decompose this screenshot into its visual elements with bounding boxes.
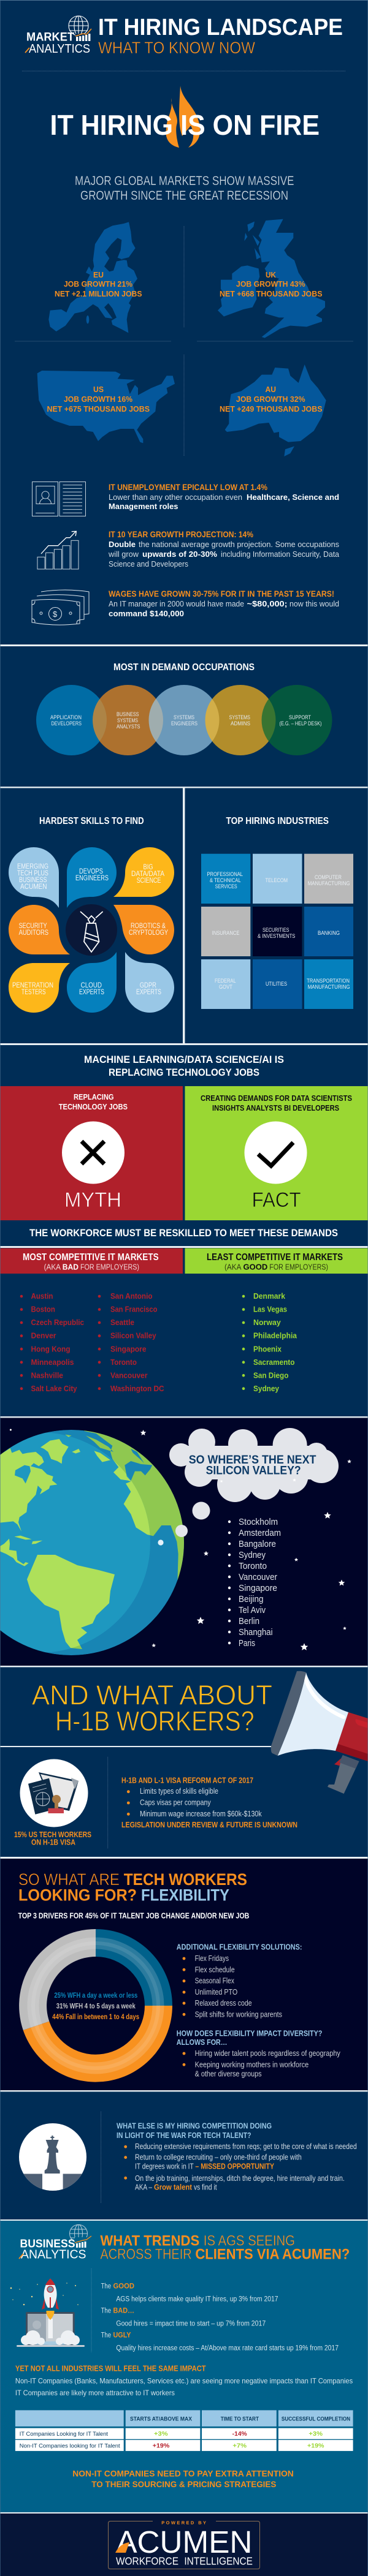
tile: securities: SECURITIES (263, 927, 289, 934)
donut labels: 44% Fall in between 1 to 4 days (52, 2014, 139, 2021)
petal: emerging tech: BUSINESS (19, 875, 47, 884)
petal: cloud experts: EXPERTS (79, 988, 104, 996)
table: companies comparison: +3% (309, 2431, 323, 2438)
list: Washington DC (110, 1384, 164, 1393)
stat: US: US (93, 385, 104, 394)
list: cities: Berlin (239, 1616, 259, 1626)
text: visa reform act: Minimum wage increase from $60k-$130k (140, 1810, 262, 1818)
list: additional flexibility solutions: Flex Fridays (195, 1954, 229, 1963)
list: Nashville (31, 1370, 63, 1380)
banner: FOR EMPLOYERS) (80, 1262, 139, 1271)
list: Salt Lake City (31, 1384, 77, 1393)
text: good bad ugly: AGS helps clients make quality IT hires, up 3% from 2017 (116, 2296, 278, 2303)
petal: security auditors (9, 905, 70, 954)
text: what else is the competition doing: – MISSED OPPORTUNITY (195, 2162, 275, 2171)
petal: big data: SCIENCE (137, 876, 161, 885)
heading: machine learning: REPLACING TECHNOLOGY JOBS (109, 1067, 259, 1078)
icon: chess king (17, 2123, 88, 2192)
panel: H-1B (0, 1671, 368, 1848)
icon: resume (32, 482, 86, 516)
list: cities: Amsterdam (239, 1528, 281, 1538)
table: companies comparison: TIME TO START (221, 2415, 259, 2422)
tile: utilities: UTILITIES (266, 981, 287, 988)
stat: EU: NET +2.1 MILLION JOBS (55, 289, 142, 298)
list: Philadelphia (253, 1331, 297, 1340)
heading: MOST IN DEMAND OCCUPATIONS (113, 662, 255, 673)
list: diversity impact: Hiring wider talent pools regardless of geography (195, 2049, 341, 2058)
list: additional flexibility solutions: Flex schedule (195, 1965, 235, 1974)
heading: TECH WORKERS (124, 1870, 247, 1889)
list: San Francisco (110, 1305, 158, 1314)
list: cities: Beijing (239, 1594, 264, 1604)
petal: big data: DATA/DATA (131, 869, 164, 878)
list: cities: Vancouver (239, 1572, 277, 1582)
tile: insurance (201, 907, 250, 956)
text: wages: ~$80,000; (247, 600, 287, 608)
stat: AU: NET +249 THOUSAND JOBS (220, 404, 323, 414)
list: Denver (31, 1331, 56, 1340)
tile: computer manufacturing: MANUFACTURING (308, 880, 350, 887)
heading: CLIENTS VIA ACUMEN? (195, 2246, 350, 2263)
text: growth projection: Double (109, 540, 136, 549)
stat: EU: JOB GROWTH 21% (64, 279, 132, 289)
thought bubble: SILICON VALLEY? (206, 1464, 301, 1478)
circle labels: SUPPORT (289, 714, 311, 721)
list: San Antonio (110, 1291, 153, 1301)
circle labels: ANALYSTS (117, 723, 140, 730)
tile: professional: SERVICES (215, 883, 237, 890)
callout: non-IT companies: TO THEIR SOURCING & PRICING STRATEGIES (91, 2479, 276, 2489)
petal: emerging tech (9, 847, 59, 908)
petal: robotics: CRYPTOLOGY (129, 928, 168, 937)
stat: US: JOB GROWTH 16% (64, 395, 132, 404)
panel: myth (0, 1086, 183, 1220)
tile: banking: BANKING (318, 930, 340, 937)
banner: BAD (63, 1262, 79, 1271)
list: cities (228, 1517, 281, 1649)
heading: HARDEST SKILLS TO FIND (39, 816, 144, 826)
panel: least competitive markets (185, 1248, 368, 1393)
banner: (AKA (44, 1262, 61, 1271)
list: Boston (31, 1305, 55, 1314)
text: visa reform act: Limits types of skills eligible (140, 1787, 218, 1796)
logo: Acumen: ACUMEN (116, 2525, 252, 2559)
list: Minneapolis (31, 1358, 74, 1367)
text: unemployment: Management roles (109, 502, 178, 511)
panel: footer (0, 2514, 368, 2576)
tile: insurance: INSURANCE (212, 930, 239, 937)
text: good bad ugly: The (101, 2308, 111, 2315)
panel: AGS trends (0, 2221, 368, 2512)
logo: Acumen: INTELLIGENCE (184, 2555, 253, 2567)
circle labels: SYSTEMS (229, 714, 250, 721)
donut labels (52, 1992, 139, 2021)
text: good bad ugly: The (101, 2283, 111, 2291)
list: Seattle (110, 1318, 134, 1327)
tile: federal govt: FEDERAL (215, 978, 236, 984)
stat: UK: NET +668 THOUSAND JOBS (220, 289, 323, 298)
tile: telecom: TELECOM (265, 877, 288, 884)
stat: AU: AU (265, 385, 276, 394)
stat: UK: UK (266, 270, 277, 279)
stat: US (47, 385, 150, 414)
text: what else is the competition doing: Return to college recruiting – only one-third of people with (135, 2153, 302, 2161)
stat: US: NET +675 THOUSAND JOBS (47, 404, 150, 414)
list: Phoenix (253, 1344, 282, 1353)
text: unemployment: Lower than any other occupation even (109, 493, 242, 502)
stars (10, 1429, 351, 1650)
callout: non-IT companies: NON-IT COMPANIES NEED TO PAY EXTRA ATTENTION (72, 2468, 294, 2478)
table: companies comparison: -14% (232, 2431, 247, 2438)
logo: Business Analytics (19, 2225, 91, 2262)
circle labels: APPLICATION (50, 714, 82, 721)
circle labels (50, 711, 321, 730)
text: good bad ugly: UGLY (113, 2332, 131, 2340)
panel: fact: INSIGHTS ANALYSTS BI DEVELOPERS (212, 1103, 339, 1112)
list: cities: Stockholm (239, 1517, 278, 1527)
tile: securities (253, 907, 302, 956)
heading: on fire: IT HIRING IS ON FIRE (50, 109, 320, 141)
panel: top hiring industries (201, 816, 353, 1009)
icon: passport (20, 1759, 88, 1827)
petal: security auditors: SECURITY (19, 921, 47, 930)
table: companies comparison: +19% (153, 2443, 169, 2449)
petal: penetration testers: TESTERS (21, 988, 46, 996)
logo: Acumen: WORKFORCE (116, 2555, 178, 2567)
text: what else is the competition doing (117, 2121, 357, 2192)
heading: LOOKING FOR? (18, 1886, 137, 1905)
list: additional flexibility solutions: Relaxed dress code (195, 1999, 252, 2008)
list: additional flexibility solutions: Seasonal Flex (195, 1977, 235, 1985)
list: cities: Singapore (239, 1583, 277, 1593)
text: growth projection: the national average growth projection. Some occupations (139, 540, 339, 549)
table: companies comparison: STARTS AT/ABOVE MAX (130, 2415, 192, 2422)
tile: professional: & TECHNICAL (210, 877, 241, 884)
stat: UK (220, 270, 323, 298)
text: good bad ugly (101, 2283, 339, 2352)
donut chart (19, 1929, 172, 2082)
text: major global markets (75, 174, 294, 203)
panel: hiring competition (17, 2112, 357, 2203)
stat: EU (55, 270, 142, 298)
logo: Market Analytics: MARKET (26, 31, 74, 44)
text: growth projection (108, 530, 339, 568)
table: companies comparison (15, 2410, 353, 2451)
text: what else is the competition doing: IT degrees work in IT (135, 2162, 194, 2171)
text: not all industries (15, 2365, 353, 2397)
text: what else is the competition doing: AKA – (135, 2183, 152, 2192)
circle labels: SYSTEMS (174, 714, 194, 721)
list: Vancouver (110, 1370, 147, 1380)
text: wages: WAGES HAVE GROWN 30-75% FOR IT IN THE PAST 15 YEARS! (109, 589, 334, 599)
heading (18, 1870, 247, 1905)
logo: Market Analytics (25, 16, 91, 56)
stat: UK: JOB GROWTH 43% (236, 279, 305, 289)
map: US (37, 371, 175, 443)
text: not all industries: YET NOT ALL INDUSTRIES WILL FEEL THE SAME IMPACT (15, 2365, 206, 2373)
tile: transportation manufacturing (304, 959, 353, 1009)
panel: myth: TECHNOLOGY JOBS (59, 1102, 128, 1111)
heading (32, 1680, 272, 1737)
heading: H-1B WORKERS? (55, 1705, 254, 1737)
logo: Business Analytics: BUSINESS (20, 2237, 75, 2250)
petal: robotics (113, 905, 174, 954)
list: Las Vegas (253, 1305, 287, 1314)
text: major global markets: GROWTH SINCE THE GREAT RECESSION (80, 189, 288, 203)
list: Sacramento (253, 1358, 294, 1367)
banner (0, 1248, 183, 1274)
table: companies comparison: SUCCESSFUL COMPLETION (282, 2415, 350, 2422)
panel: header (0, 0, 368, 71)
table: companies comparison: +7% (232, 2443, 247, 2449)
petal: emerging tech: EMERGING (17, 862, 48, 871)
list: Norway (253, 1318, 282, 1327)
map: EU (48, 222, 137, 333)
thought bubble: SO WHERE’S THE NEXT (189, 1453, 316, 1467)
petal: devops: DEVOPS (79, 867, 103, 875)
icon: flame (166, 86, 200, 148)
circle labels: DEVELOPERS (52, 720, 82, 727)
text: wages (109, 589, 339, 618)
banner: LEAST COMPETITIVE IT MARKETS (207, 1252, 343, 1263)
heading: WHAT TRENDS (100, 2232, 199, 2249)
heading: ACROSS THEIR (100, 2246, 192, 2263)
tile: transportation manufacturing: MANUFACTURING (308, 984, 350, 991)
text: visa reform act: Caps visas per company (140, 1799, 211, 1807)
list: cities: Shanghai (239, 1627, 272, 1637)
text: good bad ugly: BAD… (113, 2308, 134, 2315)
list: additional flexibility solutions: ADDITIONAL FLEXIBILITY SOLUTIONS: (177, 1943, 302, 1952)
banner: MOST COMPETITIVE IT MARKETS (23, 1252, 159, 1263)
title: IT HIRING LANDSCAPE (98, 15, 343, 40)
icon: money: $ (53, 610, 58, 619)
petal: gdpr experts (125, 952, 174, 1013)
heading: workforce reskilled: THE WORKFORCE MUST BE RESKILLED TO MEET THESE DEMANDS (29, 1228, 338, 1239)
list: Singapore (110, 1344, 146, 1353)
tile: computer manufacturing (304, 854, 353, 904)
subheading: TOP 3 DRIVERS FOR 45% OF IT TALENT JOB CHANGE AND/OR NEW JOB (18, 1911, 249, 1920)
circle labels: SYSTEMS (117, 717, 138, 724)
list: San Diego (253, 1370, 288, 1380)
text: wages: now this would (289, 600, 339, 608)
text: not all industries: Non-IT Companies (Banks, Manufacturers, Services etc.) are seeing more negative impacts than IT Companies (15, 2376, 353, 2385)
petal: emerging tech: TECH PLUS (17, 869, 48, 877)
heading: TOP HIRING INDUSTRIES (226, 816, 329, 826)
stat: AU (220, 385, 323, 414)
list: cities: Paris (239, 1638, 255, 1649)
stat: 15 percent: ON H-1B VISA (31, 1838, 75, 1847)
text: unemployment: Healthcare, Science and (247, 493, 339, 502)
petal: devops: ENGINEERS (75, 874, 109, 882)
stat: AU: JOB GROWTH 32% (236, 395, 305, 404)
text: powered by: POWERED BY (161, 2520, 206, 2525)
table: companies comparison: +3% (154, 2431, 168, 2438)
list: Czech Republic (31, 1318, 84, 1327)
petal: robotics: ROBOTICS & (131, 921, 166, 930)
icon: megaphone (271, 1671, 368, 1794)
text: visa reform act (121, 1776, 297, 1829)
heading: machine learning: MACHINE LEARNING/DATA SCIENCE/AI IS (84, 1054, 284, 1065)
logo: Business Analytics: ANALYTICS (21, 2248, 86, 2262)
circle labels: ADMINS (231, 720, 250, 727)
table: companies comparison: +19% (307, 2443, 324, 2449)
tile: securities: & INVESTMENTS (258, 933, 295, 940)
heading: AND WHAT ABOUT (32, 1680, 272, 1711)
tile: computer manufacturing: COMPUTER (315, 874, 342, 881)
petal: gdpr experts: EXPERTS (136, 988, 161, 996)
petal: cloud experts (67, 952, 117, 1013)
panel: flexibility (0, 1859, 368, 2090)
panel: fact: FACT (252, 1188, 301, 1212)
list: cities: Bangalore (239, 1539, 276, 1549)
petal: devops (67, 847, 117, 908)
list: diversity impact: HOW DOES FLEXIBILITY IMPACT DIVERSITY? (177, 2028, 322, 2038)
text: good bad ugly: Good hires = impact time to start – up 7% from 2017 (116, 2320, 266, 2327)
map: AU (225, 364, 326, 456)
banner (185, 1248, 368, 1274)
list: additional flexibility solutions: Unlimited PTO (195, 1988, 238, 1996)
list: diversity impact: & other diverse groups (195, 2069, 262, 2078)
list: Austin (31, 1291, 53, 1301)
list: cities: Tel Aviv (239, 1605, 266, 1615)
table: companies comparison: IT Companies Looking for IT Talent (20, 2431, 108, 2438)
heading: machine learning (84, 1054, 284, 1078)
list: cities: Toronto (239, 1561, 267, 1571)
logo: Market Analytics: ANALYTICS (29, 42, 90, 56)
globe (0, 1421, 194, 1655)
text: major global markets: MAJOR GLOBAL MARKETS SHOW MASSIVE (75, 174, 294, 188)
text: growth projection: Science and Developers (109, 560, 188, 568)
petal: penetration testers (9, 963, 70, 1013)
petal: emerging tech: ACUMEN (20, 882, 47, 891)
text: growth projection: will grow (108, 550, 139, 559)
heading: SO WHAT ARE (18, 1870, 120, 1889)
text: not all industries: IT Companies are likely more attractive to IT workers (15, 2389, 175, 2397)
banner: (AKA (224, 1262, 242, 1271)
heading: FLEXIBILITY (141, 1886, 229, 1905)
text: what else is the competition doing: Grow talent (154, 2183, 193, 2192)
text: what else is the competition doing: WHAT ELSE IS MY HIRING COMPETITION DOING (117, 2121, 272, 2130)
list: Silicon Valley (110, 1331, 156, 1340)
icon: growth chart (37, 531, 79, 569)
text: growth projection: including Information Security, Data (221, 550, 339, 559)
list: Hong Kong (31, 1344, 71, 1353)
petal: cloud experts: CLOUD (81, 981, 102, 989)
panel: myth: MYTH (64, 1188, 121, 1212)
panel: next silicon valley (0, 1418, 368, 1666)
text: growth projection: IT 10 YEAR GROWTH PROJECTION: 14% (109, 530, 253, 539)
heading: IS AGS SEEING (204, 2232, 295, 2249)
icon: money (32, 590, 89, 625)
panel: most competitive markets (0, 1248, 183, 1393)
map: UK (218, 219, 325, 338)
tile: federal govt (201, 959, 250, 1009)
banner: FOR EMPLOYERS) (269, 1262, 328, 1271)
text: wages: An IT manager in 2000 would have made (109, 600, 244, 608)
petal: big data (113, 847, 174, 897)
panel: hardest skills (9, 816, 174, 1013)
text: wages: command $140,000 (109, 610, 184, 618)
text: good bad ugly: Quality hires increase costs – At/Above max rate card starts up 19% from 2017 (116, 2344, 339, 2352)
tile: utilities (253, 959, 302, 1009)
list: additional flexibility solutions (177, 1943, 302, 2019)
donut labels: 25% WFH a day a week or less (54, 1992, 137, 2000)
text: what else is the competition doing: IN LIGHT OF THE WAR FOR TECH TALENT? (117, 2131, 251, 2140)
list: diversity impact: Keeping working mothers in workforce (195, 2060, 309, 2069)
panel: most in demand occupations (36, 662, 332, 755)
petal: big data: BIG (144, 863, 153, 871)
tile: federal govt: GOVT (219, 984, 232, 991)
text: visa reform act: H-1B AND L-1 VISA REFORM ACT OF 2017 (121, 1776, 253, 1785)
tile: telecom (253, 854, 302, 904)
list: diversity impact (177, 2028, 341, 2078)
text: good bad ugly: The (101, 2332, 111, 2340)
tile: transportation manufacturing: TRANSPORTATION (307, 978, 350, 984)
donut labels: 31% WFH 4 to 5 days a week (56, 2003, 136, 2011)
tile: professional (201, 854, 250, 904)
panel: myth: REPLACING (74, 1092, 114, 1101)
circle labels: (E.G. – HELP DESK) (280, 720, 321, 727)
callout: non-IT companies (72, 2468, 294, 2489)
thought bubble (169, 1428, 339, 1537)
tile: professional: PROFESSIONAL (207, 871, 243, 878)
list (242, 1291, 297, 1393)
icon: tie (66, 904, 117, 956)
text: unemployment: IT UNEMPLOYMENT EPICALLY LOW AT 1.4% (109, 483, 267, 492)
text: visa reform act: LEGISLATION UNDER REVIEW & FUTURE IS UNKNOWN (121, 1820, 297, 1829)
text: unemployment (109, 483, 339, 511)
list: cities: Sydney (239, 1550, 266, 1560)
list: Toronto (110, 1358, 137, 1367)
stat: 15 percent (14, 1830, 91, 1847)
venn circles (36, 685, 107, 755)
list: Sydney (253, 1384, 280, 1393)
stat: EU: EU (93, 270, 104, 279)
circle labels: ENGINEERS (171, 720, 197, 727)
tile: banking (304, 907, 353, 956)
list: diversity impact: ALLOWS FOR… (177, 2038, 227, 2047)
panel: fact (185, 1086, 368, 1220)
subtitle: WHAT TO KNOW NOW (98, 39, 255, 57)
circle labels: BUSINESS (117, 711, 139, 718)
stat: 15 percent: 15% US TECH WORKERS (14, 1830, 91, 1839)
list: additional flexibility solutions: Split shifts for working parents (195, 2010, 282, 2019)
banner: GOOD (243, 1262, 267, 1271)
list (20, 1291, 164, 1393)
petal: gdpr experts: GDPR (140, 981, 156, 989)
petal: penetration testers: PENETRATION (12, 981, 53, 989)
table: companies comparison: Non-IT Companies looking for IT Talent (20, 2443, 120, 2449)
text: growth projection: upwards of 20-30% (142, 550, 217, 559)
text: what else is the competition doing: vs find it (194, 2183, 217, 2192)
heading (100, 2232, 350, 2263)
text: good bad ugly: GOOD (113, 2283, 134, 2291)
petal: security auditors: AUDITORS (19, 928, 48, 937)
list: Denmark (253, 1291, 286, 1301)
icon: rocket launch (10, 2278, 85, 2347)
